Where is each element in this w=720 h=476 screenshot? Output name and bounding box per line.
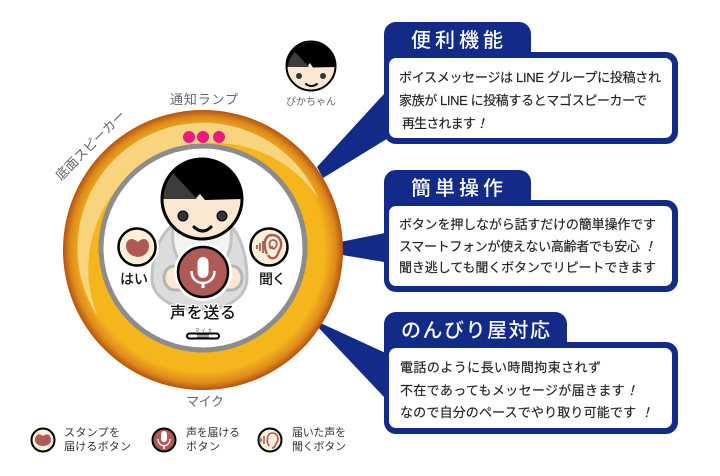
- legend text: 声を届ける: [186, 425, 240, 439]
- icon: heart button: [115, 225, 159, 269]
- legend text: [292, 425, 346, 453]
- label: 聞く: 聞く: [259, 271, 286, 287]
- heading: 便利機能: 便利機能: [411, 29, 503, 52]
- text block: 簡単操作 description: [399, 217, 656, 275]
- text block: 簡単操作 description: 聞き逃しても聞くボタンでリピートできます: [399, 260, 656, 275]
- text block: のんびり屋対応 description: なので自分のペースでやり取り可能です ！: [400, 405, 653, 420]
- legend text: 聞くボタン: [292, 440, 346, 453]
- text block: 簡単操作 description: ボタンを押しながら話すだけの簡単操作です: [399, 217, 656, 232]
- connector: panel 3 to device: [316, 321, 390, 397]
- microphone slot: [187, 328, 219, 338]
- legend text: 届けるボタン: [64, 440, 131, 453]
- notification lamps: [183, 131, 225, 143]
- heading: のんびり屋対応: のんびり屋対応: [401, 319, 550, 342]
- icon: ear button: [247, 225, 291, 269]
- gloss highlight: [78, 123, 318, 317]
- panel: 便利機能: [384, 22, 678, 144]
- microphone slot: マイク: [195, 328, 212, 334]
- text block: 便利機能 description: [399, 70, 661, 131]
- label: 通知ランプ: 通知ランプ: [170, 92, 238, 107]
- panel: のんびり屋対応: [384, 312, 678, 434]
- label: はい: はい: [120, 271, 148, 287]
- text block: 便利機能 description: ボイスメッセージは LINE グループに投稿され: [399, 70, 661, 85]
- legend text: ボタン: [186, 440, 220, 453]
- label: 声を送る: 声を送る: [170, 304, 236, 322]
- legend: stamp button: [32, 426, 131, 453]
- device: speaker: [63, 110, 343, 390]
- text block: 便利機能 description: 再生されます！: [402, 116, 488, 131]
- character: ぴかちゃん: [286, 42, 336, 90]
- legend text: [186, 425, 240, 453]
- icon: heart: [32, 428, 54, 452]
- legend: voice button: [152, 425, 240, 453]
- character head: [162, 159, 242, 239]
- heading: 簡単操作: 簡単操作: [411, 177, 503, 200]
- icon: microphone: [152, 428, 176, 452]
- text block: のんびり屋対応 description: 電話のように長い時間拘束されず: [400, 360, 601, 375]
- legend text: スタンプを: [64, 426, 120, 439]
- connector: panel 1 to device: [317, 94, 390, 178]
- connector: panel 2 to device: [330, 232, 390, 263]
- character body: [152, 221, 247, 310]
- device face: [101, 146, 305, 350]
- text block: のんびり屋対応 description: 不在であってもメッセージが届きます！: [400, 383, 638, 398]
- label: マイク: マイク: [186, 394, 224, 409]
- text block: 簡単操作 description: スマートフォンが使えない高齢者でも安心 ！: [399, 239, 656, 254]
- legend text: 届いた声を: [292, 425, 346, 439]
- legend: listen button: [258, 425, 346, 453]
- label: 底面スピーカー: 底面スピーカー: [53, 107, 128, 183]
- text block: 便利機能 description: 家族が LINE に投稿するとマゴスピーカーで: [399, 93, 647, 108]
- panel: 簡単操作: [384, 170, 678, 292]
- label: ぴかちゃん: ぴかちゃん: [286, 96, 336, 108]
- icon: microphone button: [174, 243, 232, 301]
- legend text: [64, 426, 131, 453]
- text block: のんびり屋対応 description: [400, 360, 653, 420]
- icon: ear: [258, 428, 282, 452]
